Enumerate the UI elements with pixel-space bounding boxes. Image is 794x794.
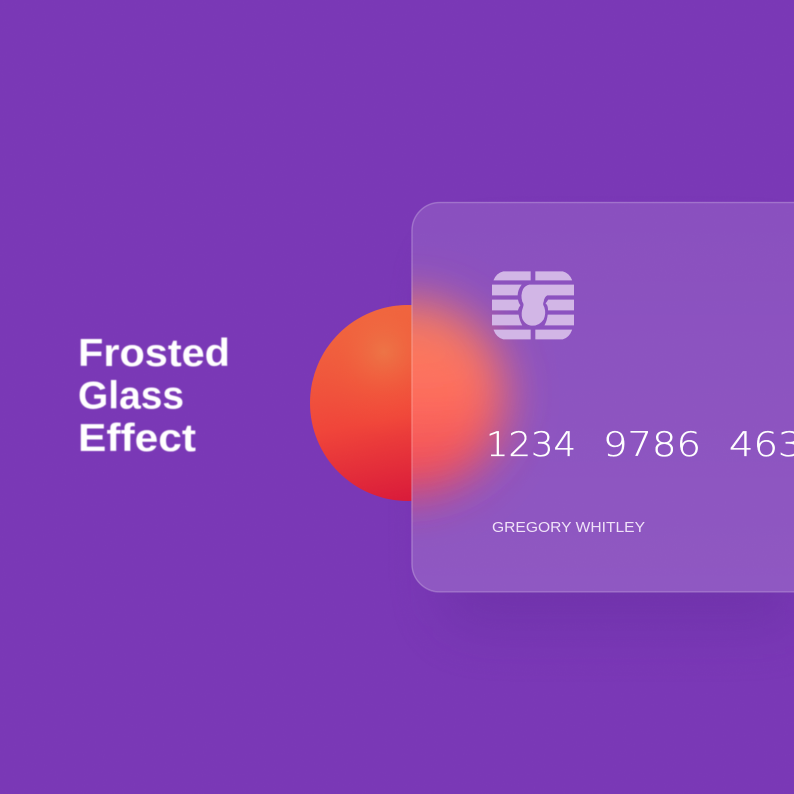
- card number: 9786: [603, 425, 701, 465]
- card shadow: [442, 250, 794, 628]
- card number: [490, 430, 794, 457]
- glass card: [411, 202, 794, 593]
- title: Frosted: [78, 332, 230, 375]
- orange sphere: [310, 305, 506, 501]
- card border: [412, 202, 794, 592]
- cardholder name: GREGORY WHITLEY: [492, 519, 645, 536]
- icon: card chip: [492, 272, 574, 339]
- frosted card surface: [412, 202, 794, 592]
- title: Effect: [78, 417, 196, 460]
- card number: 1234: [486, 425, 576, 465]
- title: Glass: [78, 374, 184, 418]
- title: [78, 332, 230, 460]
